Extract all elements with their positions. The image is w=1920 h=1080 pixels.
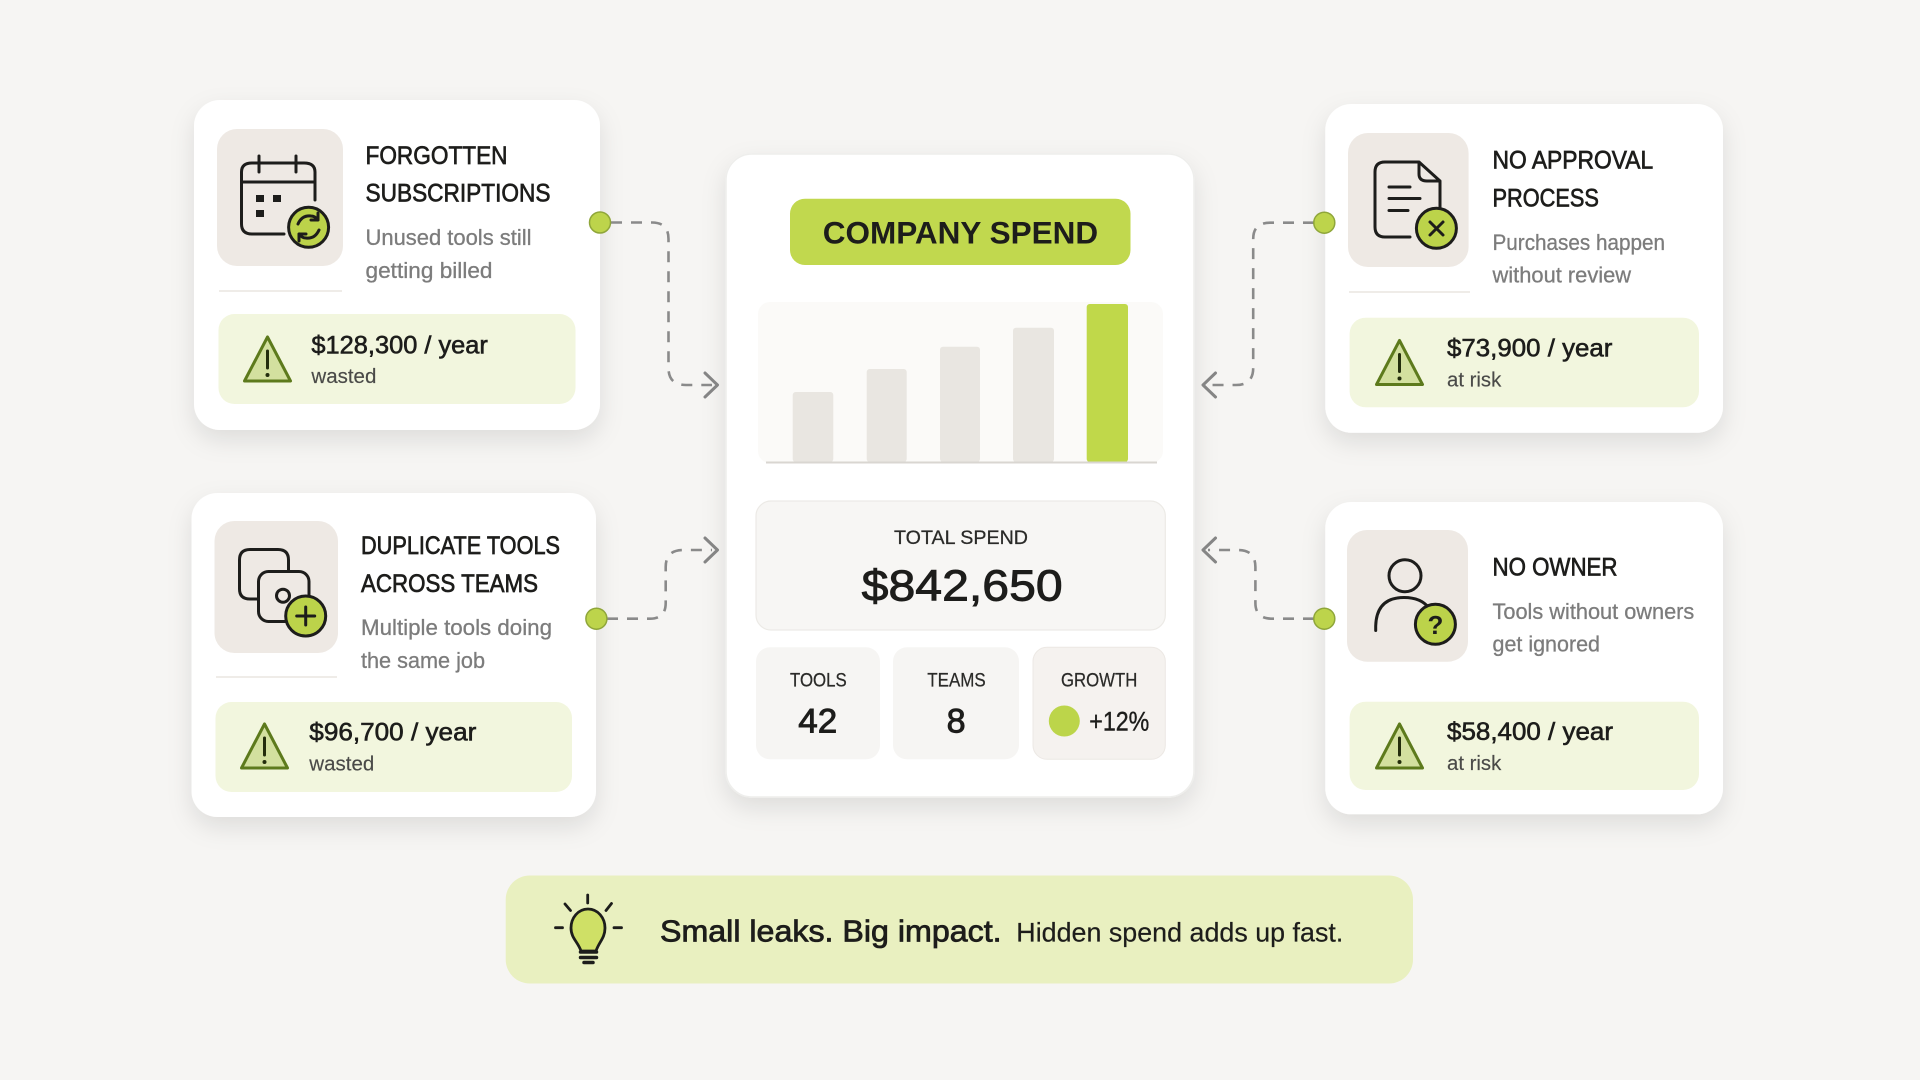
bar chart [758,302,1163,463]
connector: no approval process to company spend [1203,212,1335,397]
description: Multiple tools doing [361,615,552,640]
icon: document with cross [1348,133,1469,267]
callout: takeaway banner [506,876,1413,984]
cost callout: wasted [310,365,376,388]
takeaway text [660,914,1343,949]
description: Tools without owners [1492,599,1694,624]
description [1492,230,1665,288]
description: Purchases happen [1492,230,1665,255]
icon: warning [242,724,288,768]
icon: person with question mark [1347,530,1468,662]
connector: no owner to company spend [1203,538,1335,629]
heading: company spend [790,199,1130,265]
cost callout: $128,300 / year [311,332,488,360]
description [361,615,552,673]
heading: SUBSCRIPTIONS [366,180,550,208]
heading: ACROSS TEAMS [361,570,538,598]
panel: no owner [1325,502,1723,814]
total spend [756,501,1165,630]
stat: growth: +12% [1089,707,1149,737]
heading: NO OWNER [1492,554,1618,582]
stat: tools: TOOLS [790,671,847,692]
description: getting billed [366,258,492,283]
heading [1492,146,1653,213]
icon: warning [244,337,290,381]
heading [366,142,550,208]
panel: no approval process [1325,104,1723,433]
cost callout [216,702,572,792]
heading: NO APPROVAL [1492,146,1653,174]
description: Unused tools still [366,225,532,250]
cost callout: $73,900 / year [1447,335,1612,363]
stat: teams: 8 [947,703,966,741]
takeaway text: Hidden spend adds up fast. [1016,918,1343,948]
description: without review [1492,263,1632,288]
cost callout: at risk [1447,752,1502,775]
icon: overlapping squares with plus [214,521,338,653]
description [366,225,532,283]
icon: calendar with refresh [217,129,343,266]
total spend: TOTAL SPEND [894,528,1028,549]
stat: growth: GROWTH [1061,671,1137,692]
cost callout: at risk [1447,369,1502,392]
description [1492,599,1694,657]
heading: company spend: COMPANY SPEND [823,214,1098,250]
cost callout [1350,702,1699,790]
icon: light bulb [556,895,622,962]
heading: DUPLICATE TOOLS [361,532,560,560]
heading: FORGOTTEN [366,142,508,170]
cost callout [1350,318,1699,407]
icon: warning [1376,724,1422,768]
cost callout: $96,700 / year [309,719,476,747]
description: the same job [361,648,485,673]
icon: warning [1376,340,1422,384]
takeaway text: Small leaks. Big impact. [660,914,1002,949]
stat: tools [756,647,880,759]
panel: company spend [726,154,1194,797]
connector: forgotten subscriptions to company spend [590,212,718,397]
cost callout: wasted [308,753,374,776]
heading [361,532,560,598]
description: get ignored [1492,632,1600,657]
heading: PROCESS [1492,185,1599,213]
icon: person with question mark: ? [1427,610,1443,640]
connector: duplicate tools to company spend [586,538,718,629]
panel: forgotten subscriptions [194,100,600,430]
cost callout [218,314,576,404]
total spend: $842,650 [862,562,1063,611]
stat: teams [893,647,1019,759]
panel: duplicate tools [192,493,596,817]
stat: growth [1033,647,1165,759]
stat: tools: 42 [798,703,837,741]
cost callout: $58,400 / year [1447,718,1613,746]
stat: teams: TEAMS [927,671,986,692]
